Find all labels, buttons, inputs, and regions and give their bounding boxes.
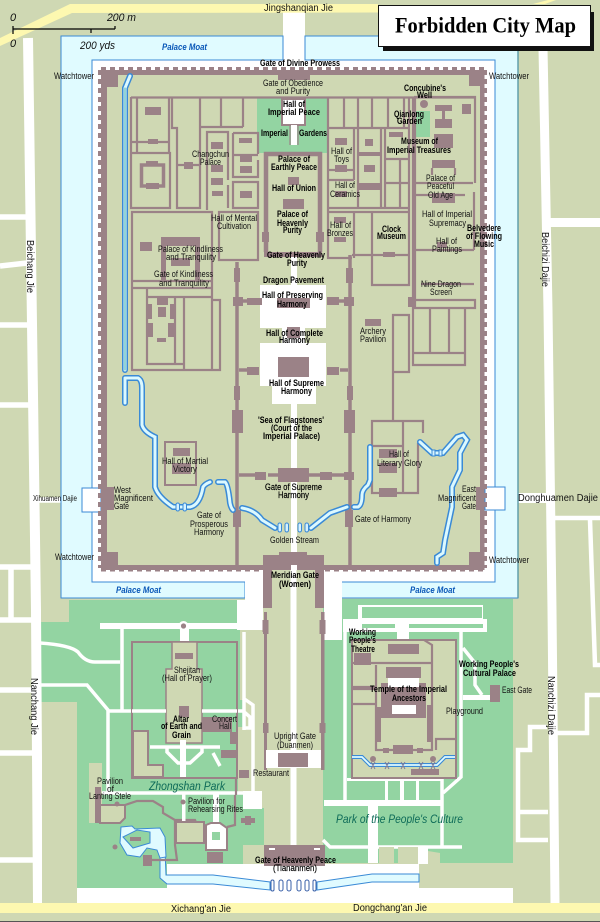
southern labels: Altar — [173, 714, 189, 724]
west palace labels: Victory — [173, 464, 197, 474]
title box — [378, 6, 594, 51]
Changchun courtyard ring — [142, 165, 164, 186]
east palace labels: Nine Dragon — [421, 279, 461, 289]
southern labels: Rehearsing Rites — [188, 804, 243, 814]
rehearsing rites compound and garden walls — [112, 778, 255, 866]
central axis labels: Gate of Heavenly — [267, 250, 325, 260]
street labels: Beichizi Dajie — [539, 232, 550, 287]
central axis labels: Dragon Pavement — [263, 275, 324, 285]
central axis labels: Golden Stream — [270, 535, 319, 545]
central axis labels: Gate of Supreme — [265, 482, 322, 492]
west gate apron — [82, 488, 101, 512]
east palace labels — [327, 83, 502, 524]
moat labels: Palace Moat — [162, 42, 208, 52]
palace moat — [61, 36, 518, 598]
central axis labels: Purity — [283, 225, 302, 235]
title box: Forbidden City Map — [395, 12, 576, 38]
central courts: side walls and gates — [232, 255, 381, 565]
Palace of Kindliness buildings — [140, 237, 200, 342]
east palace labels: Clock — [382, 224, 402, 234]
crenellations — [100, 68, 487, 570]
east palace labels: Hall of — [436, 236, 457, 246]
scale bar: 200 yds — [79, 40, 115, 52]
street labels: Xichang'an Jie — [171, 904, 231, 915]
central axis labels: Heavenly — [277, 218, 308, 228]
southern labels: Lanting Stele — [89, 791, 131, 801]
road corner top right — [533, 0, 556, 4]
southern labels — [89, 627, 532, 873]
lotus pond — [120, 826, 166, 858]
central axis labels: (Women) — [279, 579, 311, 589]
east palace labels: Garden — [397, 116, 422, 126]
scale bar — [10, 12, 136, 52]
east palace labels: Hall of — [330, 220, 351, 230]
southern labels: Playground — [446, 706, 483, 716]
west palace labels: Palace of Kindliness — [158, 244, 223, 254]
parks: green areas south of the palace — [40, 599, 513, 888]
beige strip beside Concert Hall — [238, 727, 254, 792]
axis terraces: outer court — [260, 257, 326, 604]
watchtower labels: Watchtower — [489, 555, 529, 565]
east palace labels: Museum — [377, 231, 406, 241]
central axis labels: Meridian Gate — [271, 570, 319, 580]
street labels: Beichang Jie — [24, 240, 35, 293]
southern labels: Zhongshan Park — [148, 779, 226, 793]
inner palace walls — [262, 154, 324, 257]
east palace labels: Gate — [462, 501, 476, 511]
Forbidden City enclosure — [100, 68, 487, 570]
southern labels: Grain — [172, 730, 191, 740]
southern labels: Shejitan — [174, 665, 200, 675]
west palace labels: Gate of Kindliness — [154, 269, 213, 279]
outer axis forecourt — [272, 570, 315, 850]
Gate of Heavenly Peace — [264, 845, 325, 866]
central axis labels: Gardens — [299, 128, 327, 138]
moat labels — [116, 42, 456, 595]
southern labels: Pavilion — [97, 776, 123, 786]
southern labels: Cultural Palace — [463, 668, 516, 678]
north-west halls — [145, 107, 252, 198]
central axis labels: Harmony — [281, 386, 312, 396]
moat labels: Palace Moat — [116, 585, 162, 595]
east palace labels: Peaceful — [427, 181, 454, 191]
beige strip beside west park — [246, 632, 263, 808]
west palace labels: and Tranquility — [166, 252, 216, 262]
east palace labels: Paintings — [432, 244, 462, 254]
watchtower labels: Watchtower — [55, 552, 94, 562]
beige strip west of Nanchang edge — [42, 702, 77, 903]
outer axis walls — [262, 612, 326, 770]
white forecourts beside Meridian Gate — [237, 570, 342, 640]
east palace labels: of Flowing — [466, 231, 502, 241]
watchtower labels: Watchtower — [489, 71, 529, 81]
central axis labels: Imperial Palace) — [263, 431, 320, 441]
southern labels: East Gate — [502, 685, 532, 695]
Hall of Martial Victory compound — [165, 442, 196, 485]
east palace labels: Palace of — [426, 173, 455, 183]
central axis labels: Purity — [287, 258, 307, 268]
street labels: Nanchang Jie — [28, 678, 39, 735]
east palace labels: Hall of — [335, 180, 355, 190]
east palace labels: Old Age — [428, 190, 453, 200]
central axis labels — [258, 58, 340, 589]
watchtower labels: Watchtower — [54, 71, 94, 81]
road: Jingshanqian Jie — [0, 4, 378, 46]
central axis labels: Hall of Supreme — [269, 378, 324, 388]
west palace labels: and Tranquility — [159, 278, 209, 288]
east palace labels: Music — [474, 239, 494, 249]
southern labels: (Duanmen) — [277, 740, 313, 750]
west palace labels: Hall of Martial — [162, 456, 208, 466]
central axis labels: Hall of Complete — [266, 328, 323, 338]
Hall of Imperial Peace terrace — [282, 99, 305, 145]
southern labels: of — [107, 784, 114, 794]
Golden Stream waterways — [125, 76, 467, 563]
watchtower labels — [54, 71, 529, 565]
east palace labels: Belvedere — [467, 223, 501, 233]
east palace labels: Hall of Imperial — [422, 209, 472, 219]
scale bar: 200 m — [106, 12, 136, 24]
Upright Gate — [266, 750, 321, 768]
imperial gardens — [257, 98, 328, 153]
pavilion of Lanting Stele — [89, 763, 125, 823]
palace precinct white ground — [92, 60, 494, 582]
central axis labels: Gate of Obedience — [263, 78, 323, 88]
southern labels: Gate of Heavenly Peace — [255, 855, 336, 865]
southern labels: Theatre — [351, 644, 375, 654]
east palace labels: Screen — [430, 287, 452, 297]
central axis labels: 'Sea of Flagstones' — [258, 415, 324, 425]
Altar of Earth and Grain enclosure — [132, 642, 237, 778]
east palace labels: Gate of Harmony — [355, 514, 411, 524]
southern labels: Working People's — [459, 659, 519, 669]
central axis labels: Hall of Union — [272, 183, 316, 193]
north range walls — [131, 97, 475, 210]
central axis labels: Gate of Divine Prowess — [260, 58, 340, 68]
east palace labels: Toys — [334, 154, 349, 164]
southern labels: Pavilion for — [188, 796, 225, 806]
west palace labels: Changchun — [192, 149, 229, 159]
street labels: Nanchizi Dajie — [545, 676, 556, 735]
marble bridges on Golden Stream — [176, 450, 442, 532]
west palace labels — [114, 149, 257, 537]
southern labels: of Earth and — [161, 721, 202, 731]
moat labels: Palace Moat — [410, 585, 456, 595]
southern labels: People's — [349, 635, 376, 645]
central axis labels: Hall of Preserving — [262, 290, 323, 300]
central axis labels: Harmony — [277, 299, 307, 309]
east palace labels: Archery — [360, 326, 386, 336]
scale bar: 0 — [10, 38, 17, 50]
street labels: Dongchang'an Jie — [353, 903, 427, 914]
east palace labels: Pavilion — [360, 334, 386, 344]
east palace labels: Ceramics — [330, 189, 360, 199]
Temple of the Imperial Ancestors compound — [352, 640, 456, 778]
white ceremonial band along Chang'an — [75, 888, 513, 904]
central axis labels: and Purity — [276, 86, 310, 96]
Hall of Literary Glory compound — [372, 421, 423, 497]
east palace labels: Qianlong — [394, 109, 424, 119]
central axis labels: Harmony — [279, 335, 310, 345]
street labels: Jingshanqian Jie — [264, 3, 333, 14]
southern labels: Working — [349, 627, 376, 637]
southern labels: Hall — [219, 721, 231, 731]
beige strip top-left of park — [41, 610, 69, 622]
park paths: Zhongshan Park — [40, 621, 262, 809]
southern labels: Park of the People's Culture — [336, 812, 463, 826]
central axis labels: (Court of the — [271, 423, 312, 433]
southern labels: Ancestors — [392, 693, 426, 703]
east gate apron — [485, 487, 505, 510]
east palace labels: Well — [417, 90, 432, 100]
southern labels: (Tiananmen) — [273, 863, 317, 873]
east palace labels: Concubine's — [404, 83, 446, 93]
Hall of Mental Cultivation and Kindliness walls — [132, 212, 258, 370]
east palace labels: Hall of — [389, 449, 409, 459]
west palace labels: Palace — [200, 157, 221, 167]
east range: Palace of Tranquil Longevity — [393, 97, 475, 421]
outer walls and watchtowers — [101, 70, 484, 570]
west palace labels: Hall of Mental — [211, 213, 257, 223]
southern labels: (Hall of Prayer) — [162, 673, 212, 683]
southern labels: Restaurant — [253, 768, 289, 778]
west palace labels: Cultivation — [217, 221, 251, 231]
Meridian Gate — [263, 552, 324, 608]
north-east range — [328, 97, 410, 285]
west palace labels: Harmony — [194, 527, 224, 537]
east palace labels: Hall of — [331, 146, 352, 156]
bottom edge — [0, 921, 600, 922]
east palace labels: East — [462, 484, 476, 494]
central axis labels: Imperial Peace — [268, 107, 320, 117]
east palace labels: Bronzes — [327, 228, 353, 238]
west palace labels: West — [114, 485, 131, 495]
west palace labels: Prosperous — [190, 519, 228, 529]
east palace labels: Museum of — [401, 136, 439, 146]
west palace labels: Gate of — [197, 510, 221, 520]
east palace labels: Supremacy — [429, 218, 466, 228]
west palace labels: Magnificent — [114, 493, 153, 503]
restaurant — [239, 770, 249, 778]
central axis labels: Palace of — [277, 209, 309, 219]
street labels: Xihuamen Dajie — [33, 494, 77, 503]
central axis labels: Earthly Peace — [271, 162, 317, 172]
scale bar: 0 — [10, 12, 17, 24]
east palace labels: Magnificent — [438, 493, 476, 503]
Qianlong garden — [415, 111, 430, 137]
outer moat at Tiananmen with five bridges — [160, 850, 419, 891]
west palace labels: Gate — [114, 501, 129, 511]
southern labels: Concert — [212, 714, 237, 724]
southern labels: Upright Gate — [274, 731, 316, 741]
central axis labels: Hall of — [283, 99, 306, 109]
east park paths — [323, 605, 500, 864]
central axis labels: Palace of — [278, 154, 311, 164]
central axis labels: Imperial — [261, 128, 288, 138]
road: Chang'an Jie — [0, 903, 600, 913]
central axis labels: Harmony — [278, 490, 309, 500]
east palace labels: Imperial Treasures — [387, 145, 451, 155]
east palace labels: Literary Glory — [377, 458, 422, 468]
southern labels: Temple of the Imperial — [370, 684, 447, 694]
